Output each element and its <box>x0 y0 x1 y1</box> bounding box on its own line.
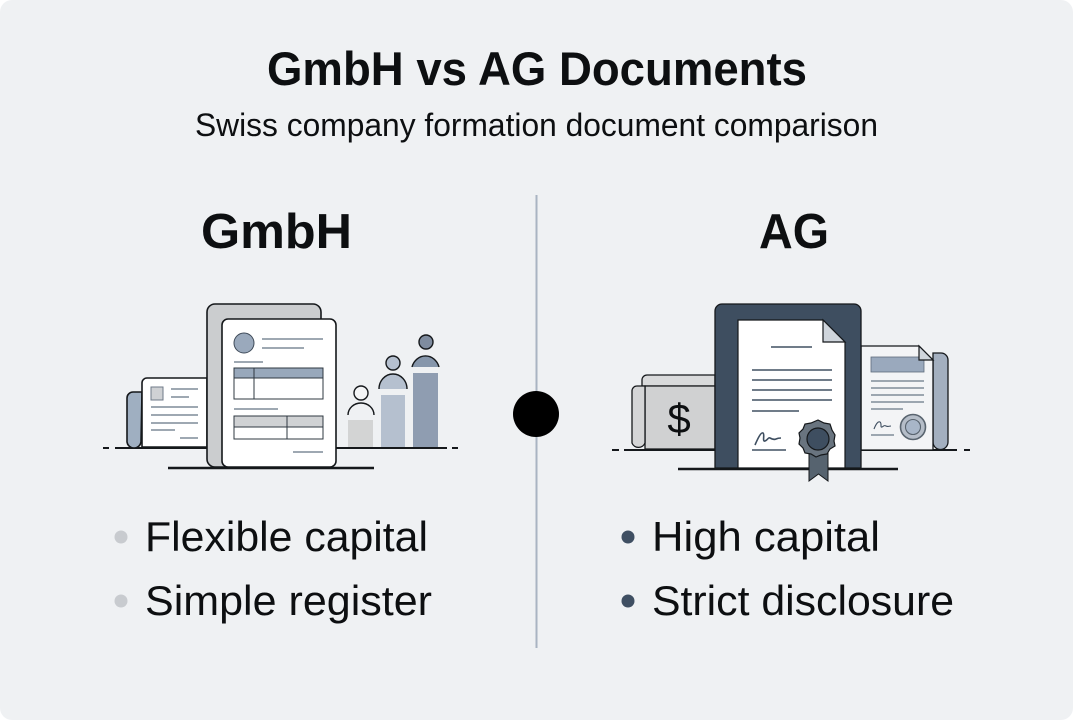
list: AG features: Strict disclosure <box>652 577 954 624</box>
subtitle: Swiss company formation document comparison <box>195 107 878 143</box>
icon: stacked form documents <box>207 304 336 467</box>
list: GmbH features: Flexible capital <box>145 513 428 560</box>
heading: GmbH: GmbH <box>201 205 352 259</box>
title: GmbH vs AG Documents <box>267 42 807 95</box>
icon: small scroll document <box>127 378 207 448</box>
icon: dark folder with contract <box>715 304 861 481</box>
icon: centre divider dot <box>513 391 559 437</box>
illustration: GmbH documents and shareholders <box>103 304 458 468</box>
icon: capital dollar folder: $ <box>667 395 691 442</box>
panel: AG <box>612 205 970 624</box>
panel: GmbH <box>103 205 458 624</box>
icon: capital dollar folder <box>632 375 715 449</box>
heading: AG: AG <box>759 205 829 259</box>
list: AG features <box>622 513 954 624</box>
chart: shareholder bars <box>348 335 439 447</box>
list: GmbH features <box>114 513 432 624</box>
icon: certificate with scroll <box>861 346 948 450</box>
list: GmbH features: Simple register <box>145 577 432 624</box>
list: AG features: High capital <box>652 513 880 560</box>
illustration: AG documents with seal <box>612 304 970 481</box>
